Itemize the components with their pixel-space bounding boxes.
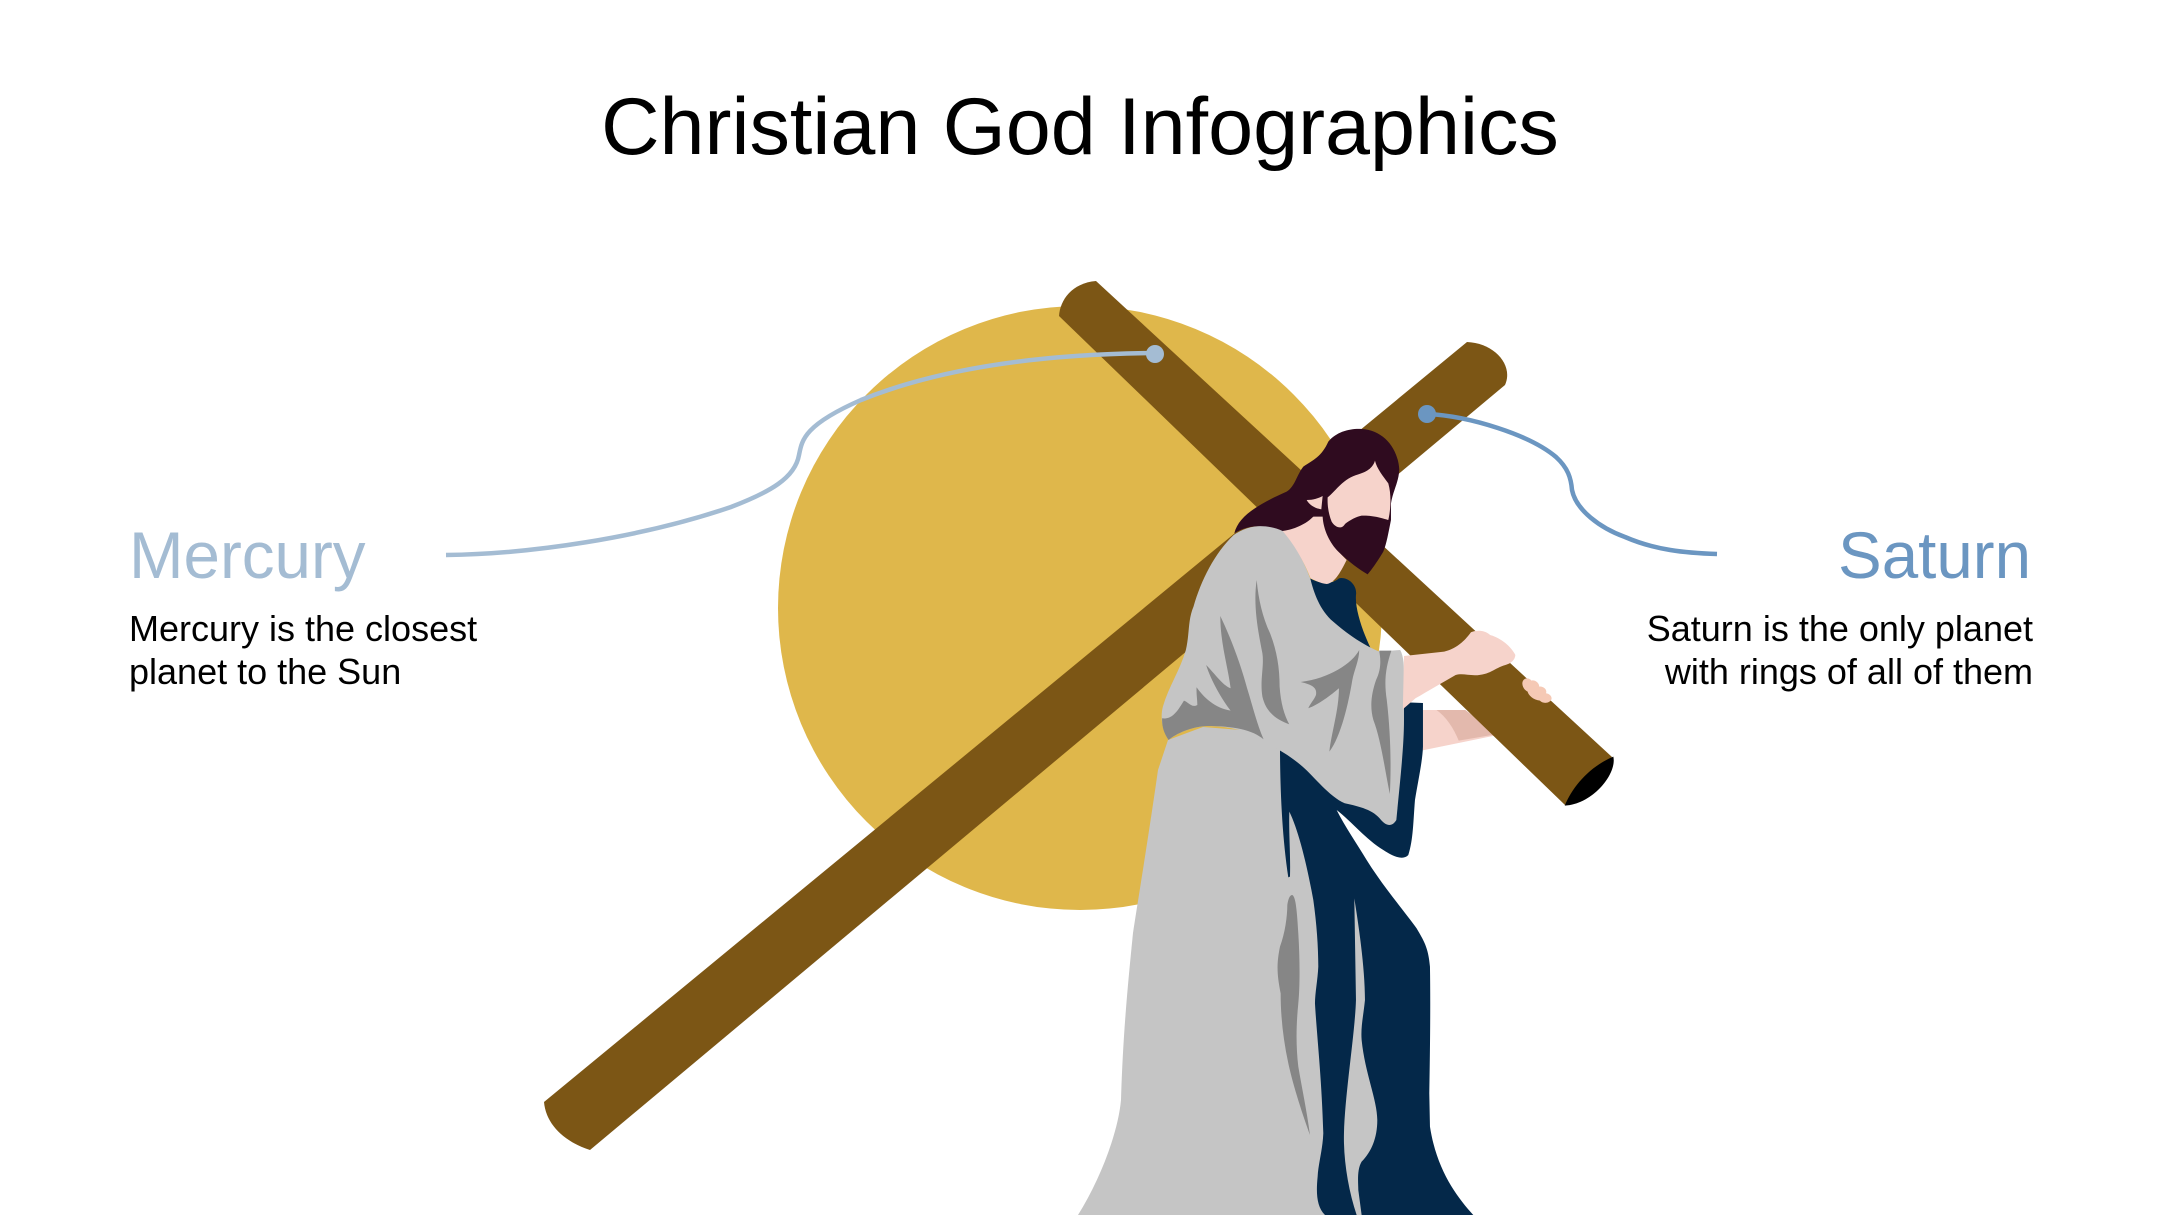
front arm and hand bbox=[1403, 631, 1515, 709]
robe dark fold: chest bbox=[1255, 580, 1289, 724]
head bbox=[1234, 429, 1399, 584]
robe dark fold: sleeve bbox=[1301, 650, 1359, 752]
cross: black cut end bbox=[1565, 757, 1614, 806]
Mercury description: planet to the Sun bbox=[129, 651, 401, 692]
Saturn description: with rings of all of them bbox=[1664, 651, 2033, 692]
face bbox=[1328, 461, 1390, 527]
ear bbox=[1307, 496, 1323, 509]
navy under-robe bbox=[1280, 700, 1473, 1215]
connector: Mercury bbox=[446, 345, 1164, 555]
chest garment bbox=[1310, 578, 1379, 657]
gown dark fold bbox=[1278, 895, 1310, 1135]
lower gown bbox=[1078, 727, 1334, 1215]
Saturn description bbox=[1647, 608, 2033, 692]
gown stripe over navy robe bbox=[1344, 898, 1377, 1215]
gold sun circle bbox=[778, 306, 1382, 910]
illustration: figure carrying the cross bbox=[544, 281, 1614, 1215]
back hand fingers bbox=[1522, 678, 1552, 703]
Saturn description: Saturn is the only planet bbox=[1647, 608, 2033, 649]
connector: Saturn bbox=[1418, 405, 1717, 554]
title: Christian God Infographics bbox=[601, 82, 1559, 172]
robe dark fold: cuff bbox=[1371, 651, 1391, 794]
back arm bbox=[1421, 710, 1498, 751]
cross: short beam bbox=[1059, 281, 1612, 805]
neck bbox=[1283, 510, 1347, 584]
robe upper with sleeve bbox=[1162, 526, 1404, 825]
cross: long beam bbox=[544, 342, 1507, 1150]
Saturn heading: Saturn bbox=[1838, 519, 2031, 592]
Mercury heading: Mercury bbox=[129, 519, 366, 592]
robe dark fold: belt bbox=[1162, 616, 1264, 740]
Mercury description: Mercury is the closest bbox=[129, 608, 477, 649]
hair and beard bbox=[1234, 429, 1399, 574]
